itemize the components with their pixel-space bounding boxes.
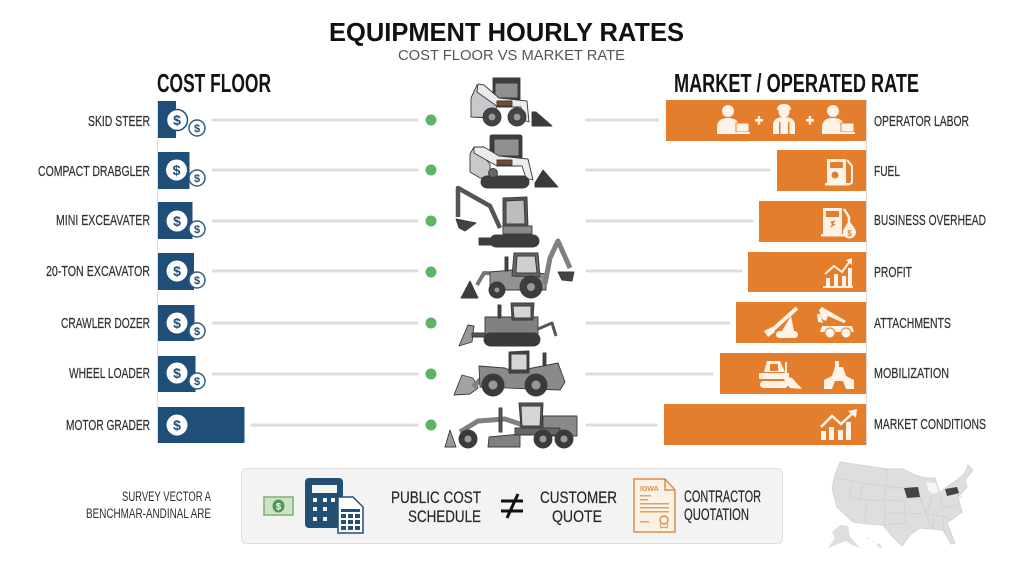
icon: coins row 2: $ bbox=[194, 173, 200, 185]
connectors: left lines bbox=[213, 120, 417, 425]
icon: backhoe bbox=[461, 241, 574, 298]
highlight: pennsylvania bbox=[945, 487, 959, 496]
label: operator labor: OPERATOR LABOR bbox=[874, 114, 969, 130]
icon: coins row 1 bbox=[166, 110, 205, 136]
icon: coins row 5 bbox=[166, 312, 205, 339]
icon: coins row 1: $ bbox=[194, 123, 200, 135]
icon: attachments bbox=[764, 307, 854, 338]
label: compact drabgler: COMPACT DRABGLER bbox=[38, 164, 150, 180]
text: contractor quotation bbox=[684, 487, 761, 524]
icon: crawler dozer bbox=[459, 303, 556, 346]
label: mini exceavater: MINI EXCEAVATER bbox=[56, 213, 150, 229]
alaska bbox=[828, 525, 860, 548]
icon: motor grader bbox=[445, 403, 577, 448]
connectors: right lines bbox=[587, 120, 769, 425]
icon: skid steer bbox=[471, 78, 552, 126]
icon: coins row 6: $ bbox=[173, 365, 181, 381]
icon: coins row 5: $ bbox=[194, 326, 200, 338]
icon: coins row 2 bbox=[166, 160, 205, 186]
icon: iowa document bbox=[634, 479, 675, 532]
bar: mobilization bbox=[720, 353, 866, 394]
subtitle: COST FLOOR VS MARKET RATE bbox=[398, 48, 625, 64]
icon: coins row 4 bbox=[166, 260, 205, 288]
text: customer quote: CUSTOMER bbox=[540, 488, 617, 507]
label: motor grader: MOTOR GRADER bbox=[66, 418, 150, 434]
icon: coins row 5: $ bbox=[173, 315, 181, 331]
icon: coins row 1: $ bbox=[173, 112, 181, 128]
icon: wheel loader bbox=[454, 351, 565, 396]
icon: mobilization bbox=[759, 361, 854, 389]
label: crawler dozer: CRAWLER DOZER bbox=[61, 316, 150, 332]
bar: 20-ton excavator bbox=[158, 253, 194, 290]
icon: market chart bbox=[821, 409, 857, 440]
bar: motor grader bbox=[158, 407, 244, 443]
bar: attachments bbox=[736, 302, 866, 343]
heading: market / operated rate: MARKET / OPERATED RATE bbox=[674, 68, 919, 98]
icon: iowa document: IOWA bbox=[640, 486, 659, 493]
text: survey note: SURVEY VECTOR A bbox=[122, 489, 211, 504]
icon: pump with money bbox=[821, 208, 856, 239]
icon: operator, worker, operator bbox=[717, 104, 855, 134]
icon: pump with money: $ bbox=[847, 229, 852, 238]
bar: operator labor bbox=[666, 100, 866, 141]
text: customer quote bbox=[540, 488, 617, 526]
icon: coins row 4: $ bbox=[194, 275, 200, 287]
highlight: iowa bbox=[904, 487, 920, 498]
bar: mini exceavater bbox=[158, 202, 192, 239]
icon: not equal bbox=[501, 494, 523, 518]
bar: business overhead bbox=[759, 201, 866, 242]
heading: cost floor: COST FLOOR bbox=[157, 68, 271, 98]
icon: cash bbox=[264, 497, 293, 515]
bar: wheel loader bbox=[158, 356, 196, 392]
status dots bbox=[426, 114, 436, 430]
icon: coins row 3: $ bbox=[194, 224, 200, 236]
text: public cost schedule: PUBLIC COST bbox=[391, 488, 481, 507]
text: customer quote: QUOTE bbox=[552, 507, 602, 526]
title: EQUIPMENT HOURLY RATES bbox=[329, 17, 684, 47]
panel: cost schedule vs quote bbox=[242, 468, 782, 544]
bar: fuel bbox=[777, 150, 866, 191]
icon: coins row 6: $ bbox=[194, 376, 200, 388]
panel: cost floor bars bbox=[38, 101, 244, 443]
icon: coins row 6 bbox=[166, 362, 205, 389]
bar: profit bbox=[748, 252, 866, 292]
label: mobilization: MOBILIZATION bbox=[874, 366, 949, 382]
label: skid steer: SKID STEER bbox=[88, 114, 150, 130]
bar: compact drabgler bbox=[158, 152, 190, 189]
map: united states with iowa and pennsylvania highlighted bbox=[828, 462, 973, 548]
label: profit: PROFIT bbox=[874, 265, 912, 281]
icon: coins row 2: $ bbox=[173, 162, 181, 178]
text: public cost schedule: SCHEDULE bbox=[408, 507, 481, 526]
bar: crawler dozer bbox=[158, 305, 194, 341]
icon: coin row 7 bbox=[166, 414, 188, 436]
icon: calculator and sheet bbox=[305, 478, 363, 533]
label: wheel loader: WHEEL LOADER bbox=[69, 366, 150, 382]
bar: market conditions bbox=[664, 404, 866, 445]
icon: fuel pump bbox=[825, 159, 852, 186]
panel: market rate bars bbox=[664, 100, 986, 445]
icon: compact track loader bbox=[470, 135, 558, 188]
text: survey note: BENCHMAR-ANDINAL ARE bbox=[86, 506, 211, 521]
icon: coin row 7: $ bbox=[173, 417, 181, 433]
icon: profit chart bbox=[823, 258, 853, 288]
text: public cost schedule bbox=[391, 488, 481, 526]
bar: skid steer bbox=[158, 101, 176, 138]
icon: coins row 4: $ bbox=[173, 263, 181, 279]
text: contractor quotation: QUOTATION bbox=[684, 505, 749, 524]
text: contractor quotation: CONTRACTOR bbox=[684, 487, 761, 506]
text: survey note bbox=[86, 489, 211, 521]
icon: coins row 3 bbox=[166, 210, 205, 237]
label: attachments: ATTACHMENTS bbox=[874, 316, 951, 332]
icon: mini excavator bbox=[456, 188, 539, 247]
label: 20-ton excavator: 20-TON EXCAVATOR bbox=[46, 264, 150, 280]
label: fuel: FUEL bbox=[874, 164, 900, 180]
icon: cash: $ bbox=[276, 502, 281, 512]
icon: coins row 3: $ bbox=[173, 213, 181, 229]
hawaii bbox=[867, 537, 882, 548]
